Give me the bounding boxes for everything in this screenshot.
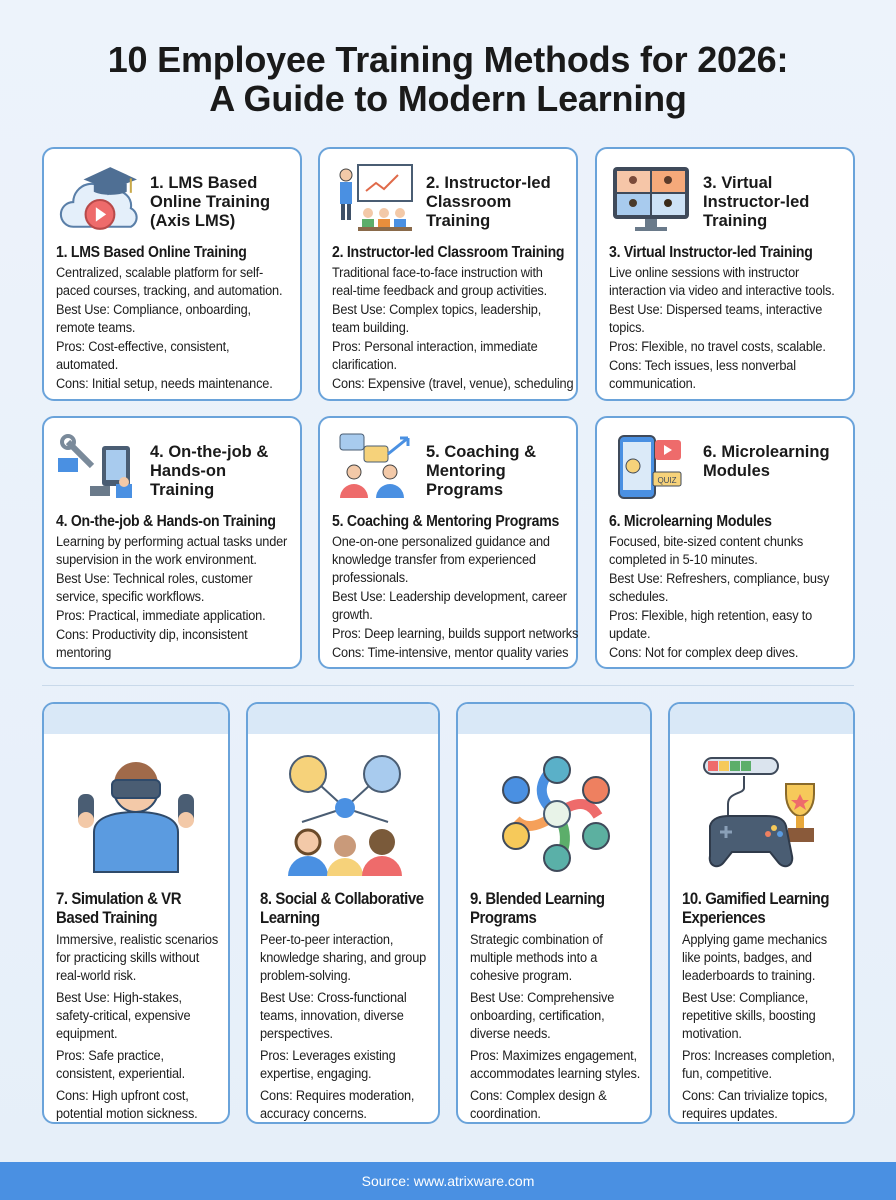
text block: Pros: Personal interaction, immediate xyxy=(332,339,538,355)
text block xyxy=(332,265,573,392)
text block: Cons: Tech issues, less nonverbal xyxy=(609,358,796,374)
heading: Instructor-led xyxy=(703,193,809,211)
text block: Cons: Not for complex deep dives. xyxy=(609,645,798,661)
heading: 5. Coaching & xyxy=(426,443,536,461)
panel: 4 On-the-job xyxy=(42,416,302,669)
panel: 8 Social xyxy=(246,702,440,1124)
text block: Pros: Cost-effective, consistent, xyxy=(56,339,229,355)
text block: accuracy concerns. xyxy=(260,1106,367,1122)
text block: Best Use: Comprehensive xyxy=(470,990,614,1006)
text block: supervision in the work environment. xyxy=(56,552,257,568)
heading: Programs xyxy=(470,908,536,927)
panel: 10 Gamified xyxy=(668,702,855,1124)
text block: Pros: Deep learning, builds support networks xyxy=(332,626,578,642)
heading: Experiences xyxy=(682,908,765,927)
icon: cloud with graduation cap xyxy=(60,167,138,230)
text block: Cons: Complex design & xyxy=(470,1088,607,1104)
text block: Cons: Productivity dip, inconsistent xyxy=(56,627,248,643)
text block: Centralized, scalable platform for self- xyxy=(56,265,263,281)
text block: Cons: Expensive (travel, venue), scheduling xyxy=(332,376,573,392)
text block: like points, badges, and xyxy=(682,950,812,966)
text block: Cons: Requires moderation, xyxy=(260,1088,414,1104)
heading xyxy=(682,889,829,927)
text block: Pros: Maximizes engagement, xyxy=(470,1048,637,1064)
text block: motivation. xyxy=(682,1026,742,1042)
text block: for practicing skills without xyxy=(56,950,199,966)
heading: Classroom xyxy=(426,193,511,211)
heading xyxy=(56,889,182,927)
heading: 10. Gamified Learning xyxy=(682,889,829,908)
text block: Best Use: High-stakes, xyxy=(56,990,182,1006)
heading: Hands-on xyxy=(150,462,226,480)
text block: coordination. xyxy=(470,1106,541,1122)
title: A Guide to Modern Learning xyxy=(209,78,687,119)
heading: 6. Microlearning xyxy=(703,443,830,461)
icon: controller, trophy, progress bar xyxy=(703,757,815,868)
heading: 8. Social & Collaborative xyxy=(260,889,424,908)
panel: 1 LMS xyxy=(42,147,302,401)
title: 10 Employee Training Methods for 2026: xyxy=(108,39,788,80)
text block: Pros: Increases completion, xyxy=(682,1048,835,1064)
panel: 3 Virtual xyxy=(595,147,855,401)
text block: Cons: Time-intensive, mentor quality varies xyxy=(332,645,568,661)
text block: problem-solving. xyxy=(260,968,351,984)
text block: perspectives. xyxy=(260,1026,333,1042)
heading: 9. Blended Learning xyxy=(470,889,605,908)
icon: network of people xyxy=(288,755,402,876)
text block xyxy=(609,265,835,392)
text block: paced courses, tracking, and automation. xyxy=(56,283,282,299)
text block xyxy=(609,534,830,661)
text block: interaction via video and interactive tools. xyxy=(609,283,835,299)
icon: phone with quiz xyxy=(618,435,682,499)
heading: 2. Instructor-led xyxy=(426,174,551,192)
text block: Immersive, realistic scenarios xyxy=(56,932,218,948)
panel: 7 VR xyxy=(42,702,230,1124)
text block: Best Use: Technical roles, customer xyxy=(56,571,252,587)
text block: Cons: Can trivialize topics, xyxy=(682,1088,827,1104)
text block: service, specific workflows. xyxy=(56,589,204,605)
sub heading: 2. Instructor-led Classroom Training xyxy=(332,244,564,261)
icon: two people with speech bubbles xyxy=(340,434,410,498)
text block: repetitive skills, boosting xyxy=(682,1008,816,1024)
icon: wrench and tablet xyxy=(58,434,132,498)
icon: classroom xyxy=(340,164,413,231)
heading xyxy=(426,174,551,230)
panel: 6 Microlearning xyxy=(595,416,855,669)
text block: Pros: Practical, immediate application. xyxy=(56,608,265,624)
text block: leaderboards to training. xyxy=(682,968,815,984)
sub heading: 1. LMS Based Online Training xyxy=(56,244,247,261)
heading: Modules xyxy=(703,462,770,480)
text block: Pros: Leverages existing xyxy=(260,1048,396,1064)
heading xyxy=(426,443,536,499)
text block: Best Use: Cross-functional xyxy=(260,990,406,1006)
title xyxy=(108,39,788,119)
text block: knowledge sharing, and group xyxy=(260,950,426,966)
text block: cohesive program. xyxy=(470,968,572,984)
text block: diverse needs. xyxy=(470,1026,551,1042)
heading: Programs xyxy=(426,481,503,499)
heading: Training xyxy=(150,481,214,499)
heading: 3. Virtual xyxy=(703,174,772,192)
text block: expertise, engaging. xyxy=(260,1066,371,1082)
icon: phone with quiz: QUIZ xyxy=(657,476,677,485)
text block: Applying game mechanics xyxy=(682,932,827,948)
text block: multiple methods into a xyxy=(470,950,597,966)
text block: potential motion sickness. xyxy=(56,1106,198,1122)
text block: One-on-one personalized guidance and xyxy=(332,534,550,550)
text block: Best Use: Complex topics, leadership, xyxy=(332,302,541,318)
heading xyxy=(703,174,809,230)
panel: 2 Instructor-led xyxy=(318,147,578,401)
sub heading: 5. Coaching & Mentoring Programs xyxy=(332,513,559,530)
text block xyxy=(56,932,218,1122)
text block: real-world risk. xyxy=(56,968,136,984)
text block: growth. xyxy=(332,607,373,623)
text block xyxy=(56,265,282,392)
text block: onboarding, certification, xyxy=(470,1008,604,1024)
text block xyxy=(56,534,288,661)
text block: teams, innovation, diverse xyxy=(260,1008,404,1024)
heading: (Axis LMS) xyxy=(150,212,235,230)
text block: Best Use: Compliance, onboarding, xyxy=(56,302,251,318)
icon: person with VR headset xyxy=(78,762,194,873)
text block: Live online sessions with instructor xyxy=(609,265,799,281)
heading: Based Training xyxy=(56,908,157,927)
text block xyxy=(260,932,426,1122)
text block xyxy=(470,932,640,1122)
text block xyxy=(682,932,835,1122)
text block: clarification. xyxy=(332,357,397,373)
text block: mentoring xyxy=(56,645,111,661)
sub heading: 6. Microlearning Modules xyxy=(609,513,772,530)
text block: team building. xyxy=(332,320,409,336)
footer xyxy=(0,1162,896,1200)
panel: 9 Blended xyxy=(456,702,652,1124)
text block: Best Use: Compliance, xyxy=(682,990,808,1006)
text block xyxy=(332,534,578,661)
heading xyxy=(703,443,830,480)
heading: Training xyxy=(426,212,490,230)
heading: 7. Simulation & VR xyxy=(56,889,181,908)
text block: communication. xyxy=(609,376,696,392)
text block: Pros: Safe practice, xyxy=(56,1048,164,1064)
text block: Peer-to-peer interaction, xyxy=(260,932,393,948)
text block: schedules. xyxy=(609,589,668,605)
text block: remote teams. xyxy=(56,320,135,336)
heading: 4. On-the-job & xyxy=(150,443,268,461)
icon: video conference monitor xyxy=(613,167,689,231)
heading xyxy=(150,443,268,499)
heading xyxy=(470,889,605,927)
text block: equipment. xyxy=(56,1026,117,1042)
text block: completed in 5-10 minutes. xyxy=(609,552,758,568)
text block: fun, competitive. xyxy=(682,1066,772,1082)
heading: Online Training xyxy=(150,193,270,211)
heading xyxy=(260,889,424,927)
text block: professionals. xyxy=(332,570,408,586)
text block: topics. xyxy=(609,320,645,336)
text block: Best Use: Leadership development, career xyxy=(332,589,567,605)
panel: 5 Coaching xyxy=(318,416,578,669)
sub heading: 3. Virtual Instructor-led Training xyxy=(609,244,813,261)
text block: Focused, bite-sized content chunks xyxy=(609,534,803,550)
icon: blended cycle xyxy=(502,756,610,872)
heading xyxy=(150,174,270,230)
text block: Cons: High upfront cost, xyxy=(56,1088,189,1104)
text block: real-time feedback and group activities. xyxy=(332,283,547,299)
text block: Best Use: Refreshers, compliance, busy xyxy=(609,571,829,587)
heading: Mentoring xyxy=(426,462,506,480)
text block: Pros: Flexible, no travel costs, scalable. xyxy=(609,339,826,355)
text block: Best Use: Dispersed teams, interactive xyxy=(609,302,822,318)
text block: Cons: Initial setup, needs maintenance. xyxy=(56,376,273,392)
text block: update. xyxy=(609,626,650,642)
heading: Training xyxy=(703,212,767,230)
footer: Source: www.atrixware.com xyxy=(362,1173,534,1189)
text block: consistent, experiential. xyxy=(56,1066,185,1082)
text block: Pros: Flexible, high retention, easy to xyxy=(609,608,812,624)
text block: automated. xyxy=(56,357,118,373)
text block: Learning by performing actual tasks under xyxy=(56,534,287,550)
sub heading: 4. On-the-job & Hands-on Training xyxy=(56,513,276,530)
text block: Traditional face-to-face instruction with xyxy=(332,265,543,281)
text block: accommodates learning styles. xyxy=(470,1066,640,1082)
text block: Strategic combination of xyxy=(470,932,603,948)
heading: 1. LMS Based xyxy=(150,174,257,192)
text block: knowledge transfer from experienced xyxy=(332,552,536,568)
text block: safety-critical, expensive xyxy=(56,1008,190,1024)
heading: Learning xyxy=(260,908,320,927)
text block: requires updates. xyxy=(682,1106,778,1122)
